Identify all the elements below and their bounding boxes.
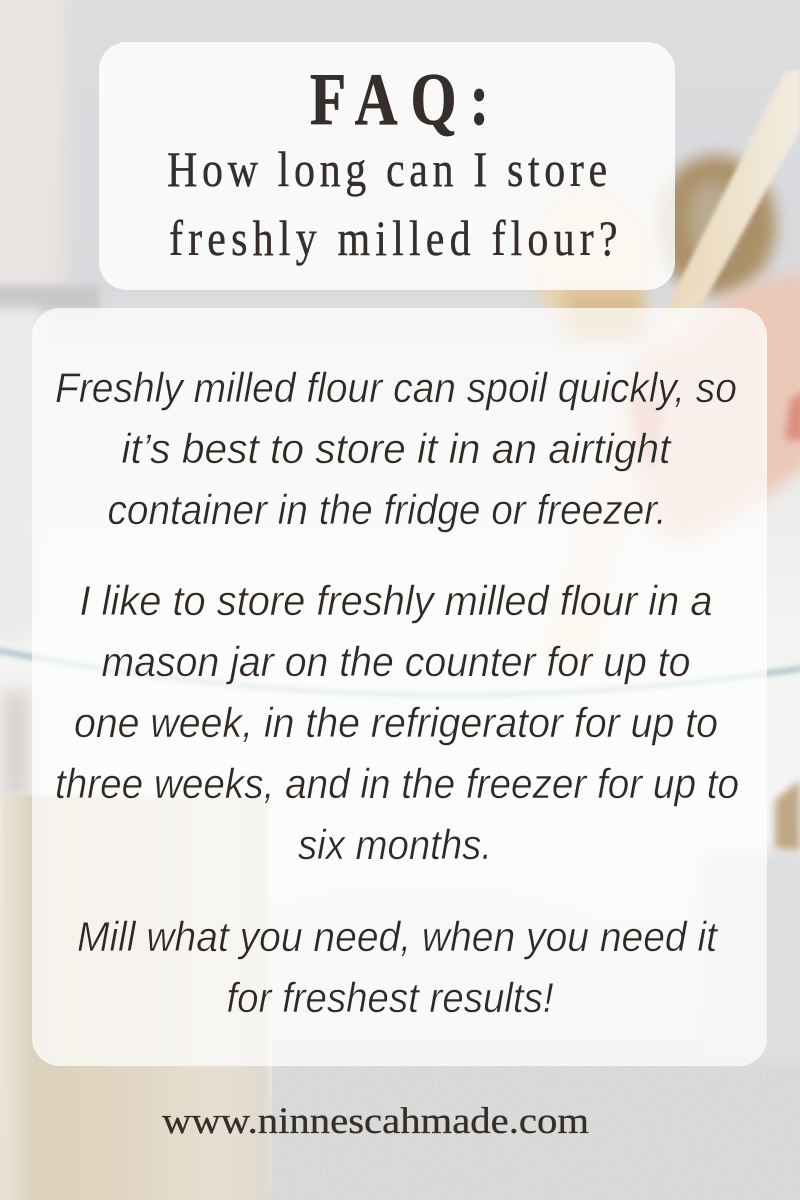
hand <box>622 272 800 542</box>
paragraph: closing tip <box>77 913 719 1021</box>
paragraph: storage times <box>55 577 739 868</box>
paragraph: spoilage: container in the fridge or freezer. <box>108 486 666 533</box>
subheading line 1: How long can I store <box>167 142 607 197</box>
paragraph: storage times: I like to store freshly milled flour in a <box>80 577 712 624</box>
heading: FAQ: FAQ: <box>310 59 489 141</box>
wooden utensil in back <box>656 155 776 295</box>
countertop <box>272 1040 800 1200</box>
spoon handle <box>660 70 800 320</box>
paragraph: spoilage: it’s best to store it in an airtight <box>122 425 673 472</box>
bowl glass <box>0 610 800 910</box>
panel: title <box>99 42 675 290</box>
left cabinet <box>0 0 65 290</box>
paragraph: storage times: three weeks, and in the freezer for up to <box>55 760 739 807</box>
jar on the left <box>0 690 32 800</box>
paragraph: spoilage <box>55 364 737 533</box>
subheading line 2: freshly milled flour? <box>169 211 618 266</box>
paragraph: spoilage: Freshly milled flour can spoil quickly, so <box>55 364 737 411</box>
paragraph: storage times: six months. <box>298 821 492 868</box>
panel: answer <box>32 308 767 1066</box>
paragraph: closing tip: for freshest results! <box>226 974 554 1021</box>
website url: www.ninnescahmade.com <box>162 1101 589 1142</box>
paragraph: storage times: one week, in the refrigerator for up to <box>74 699 718 746</box>
paragraph: storage times: mason jar on the counter for up to <box>102 638 690 685</box>
bowl rim <box>0 650 800 695</box>
paragraph: closing tip: Mill what you need, when you need it <box>77 913 719 960</box>
